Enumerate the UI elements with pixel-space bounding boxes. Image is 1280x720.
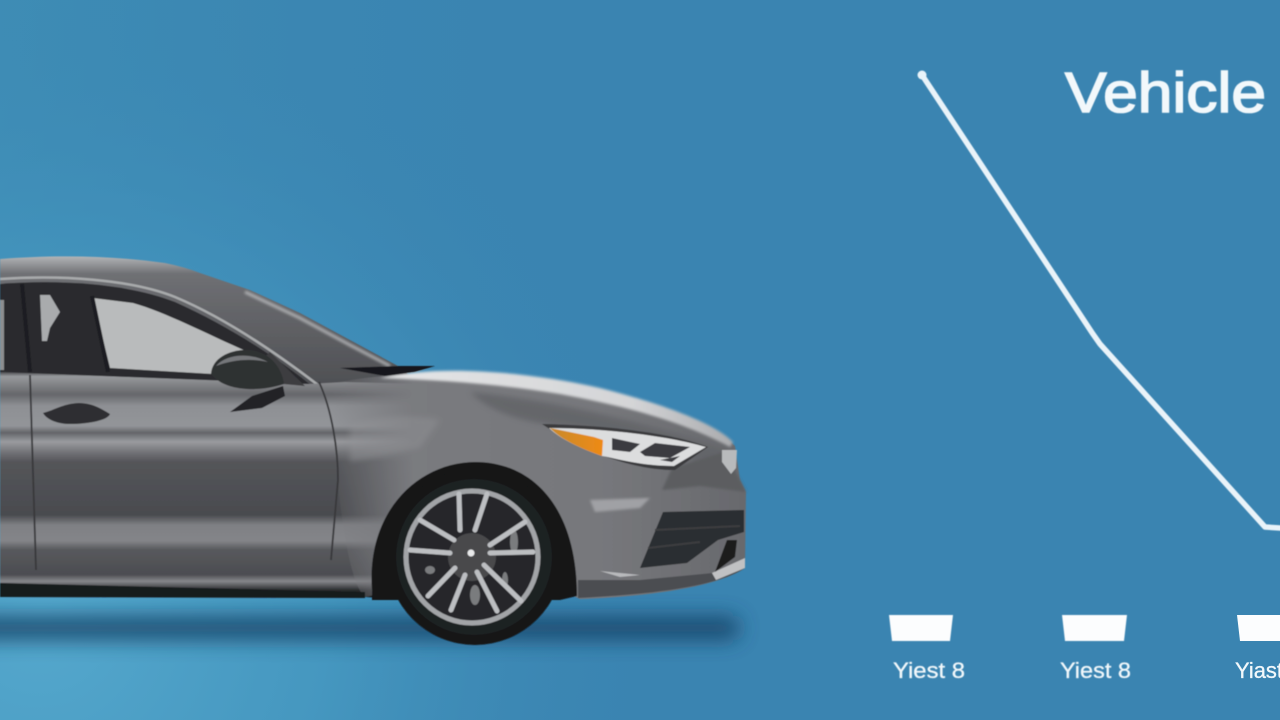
- brake detail: [425, 530, 518, 605]
- x-axis marker: second year: [1060, 615, 1131, 683]
- door mirror: [211, 350, 305, 412]
- line chart: depreciation curve: [918, 70, 1280, 528]
- car hood highlight: [380, 371, 733, 447]
- wheel spokes: [410, 494, 533, 611]
- car underside: [0, 583, 365, 598]
- car side windows: [0, 278, 318, 386]
- car door body: [0, 372, 420, 600]
- dark band under hood crease: [470, 392, 728, 472]
- wiper: [340, 366, 435, 376]
- fender light patch: [350, 416, 440, 462]
- x-axis marker: third year: [1235, 615, 1280, 683]
- x-axis marker: first year: [889, 615, 965, 683]
- front wheel: [387, 469, 563, 645]
- wheel arch: [372, 462, 577, 600]
- front air intake: [640, 510, 744, 572]
- title: Vehicle: [1065, 61, 1266, 125]
- door seam lines: [30, 375, 338, 570]
- car roof and pillar: [0, 256, 420, 392]
- headlight: [542, 424, 708, 470]
- grille badge: [722, 450, 737, 474]
- x-axis marker: first year: Yiest 8: [893, 658, 965, 683]
- lower front bumper lip: [578, 558, 745, 598]
- shaded area beside nose: [662, 452, 746, 492]
- ground shadow under car: [0, 616, 740, 640]
- car front fender and nose: [330, 374, 746, 599]
- illustration: grey sedan: [0, 256, 746, 645]
- x-axis marker: second year: Yiest 8: [1060, 658, 1131, 683]
- door handle: [43, 403, 110, 424]
